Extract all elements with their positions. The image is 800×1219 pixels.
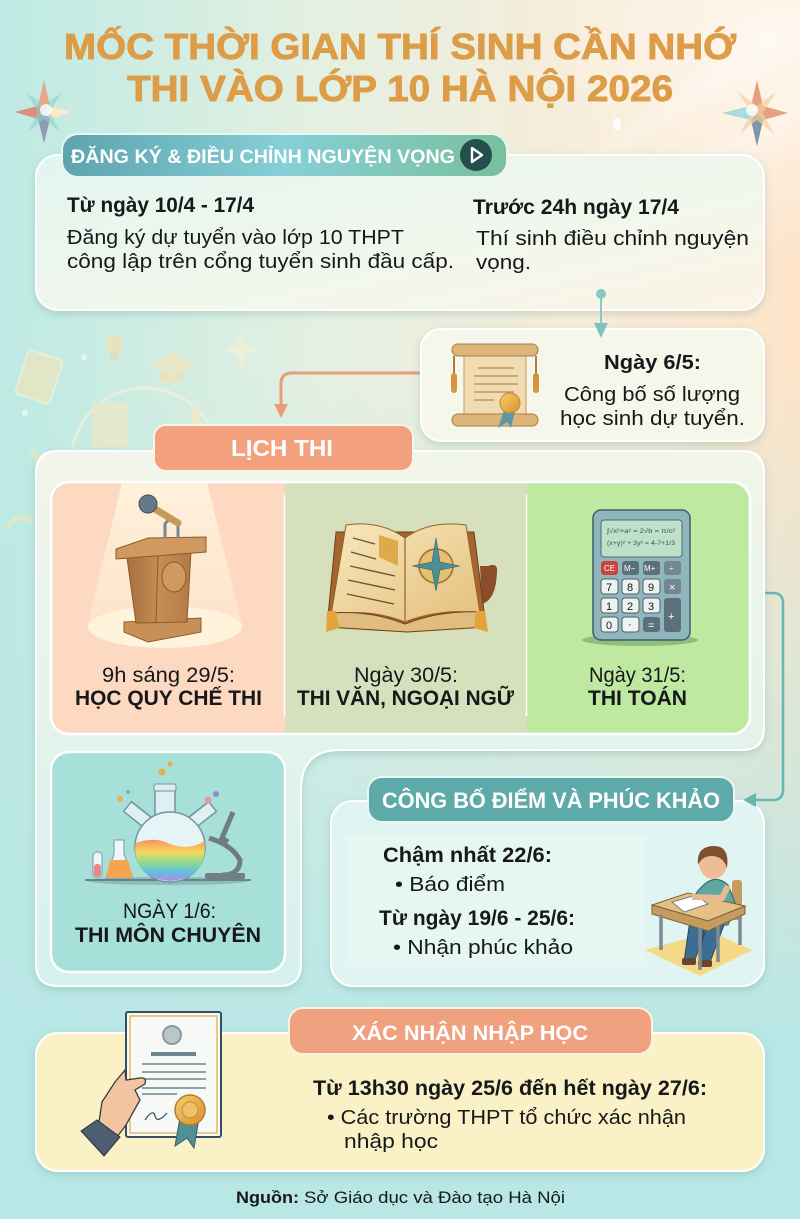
- text: registration period: công lập trên cổng tuyển sinh đầu cấp.: [67, 250, 454, 273]
- text: enrolment details: [313, 1077, 707, 1153]
- text: adjustment deadline: Trước 24h ngày 17/4: [473, 196, 679, 219]
- icon: calculator: =: [648, 620, 654, 632]
- text: 1/6: [75, 900, 261, 947]
- title: THI VÀO LỚP 10 HÀ NỘI 2026: [127, 67, 673, 109]
- icon: left compass star: [15, 80, 72, 143]
- title: [64, 25, 736, 109]
- icon: scroll: [451, 344, 539, 428]
- text: registration period: [67, 194, 454, 273]
- text: adjustment deadline: [473, 196, 749, 274]
- arrow: 6/5 to exam schedule: [274, 373, 421, 418]
- source: Nguồn:: [236, 1188, 299, 1207]
- icon: calculator: M−: [624, 564, 636, 573]
- icon: calculator: [582, 510, 698, 646]
- panel: enrolment confirmation: [36, 1008, 764, 1171]
- icon: calculator: CE: [604, 564, 615, 573]
- panel: specialised subject card: [51, 752, 285, 972]
- text: 31/5: THI TOÁN: [588, 687, 687, 710]
- text: 29/5: 9h sáng 29/5:: [102, 664, 235, 687]
- icon: open book with compass: [326, 524, 497, 632]
- panel: results and review: [331, 777, 764, 986]
- heading: results and review: CÔNG BỐ ĐIỂM VÀ PHÚC KHẢO: [382, 787, 720, 813]
- text: 31/5: Ngày 31/5:: [589, 664, 686, 687]
- text: 1/6: NGÀY 1/6:: [123, 900, 216, 923]
- arrow: math exam to results: [743, 593, 783, 807]
- heading: enrolment confirmation: XÁC NHẬN NHẬP HỌC: [352, 1020, 588, 1045]
- text: announcement 6/5: Ngày 6/5:: [604, 351, 701, 374]
- text: adjustment deadline: vọng.: [476, 251, 531, 274]
- icon: chemistry flasks and microscope: [85, 762, 251, 885]
- icon: calculator: ×: [669, 582, 675, 594]
- title: MỐC THỜI GIAN THÍ SINH CẦN NHỚ: [64, 25, 736, 67]
- arrow: registration to 6/5: [594, 289, 608, 338]
- icon: calculator: 1: [606, 601, 612, 613]
- heading: enrolment confirmation: [289, 1008, 652, 1054]
- icon: calculator: 3: [648, 601, 654, 613]
- heading: registration: ĐĂNG KÝ & ĐIỀU CHỈNH NGUYỆN VỌNG: [71, 144, 455, 168]
- text: registration period: Từ ngày 10/4 - 17/4: [67, 194, 254, 217]
- icon: calculator: (x+y)² + 3y² = 4-7+1/3: [607, 540, 675, 547]
- heading: results and review: [368, 777, 734, 822]
- icon: student at desk: [645, 846, 752, 976]
- panel: registration: [36, 134, 764, 310]
- text: results dates: [379, 844, 575, 959]
- text: registration period: Đăng ký dự tuyển vào lớp 10 THPT: [67, 226, 404, 249]
- text: announcement 6/5: [560, 351, 745, 430]
- text: announcement 6/5: học sinh dự tuyển.: [560, 407, 745, 430]
- text: results dates: Chậm nhất 22/6:: [383, 844, 552, 867]
- text: 30/5: [297, 664, 515, 710]
- heading: exam schedule: LỊCH THI: [231, 435, 333, 461]
- icon: calculator: 8: [627, 582, 633, 594]
- text: adjustment deadline: Thí sinh điều chỉnh nguyện: [476, 227, 749, 250]
- icon: hand holding certificate: [81, 1012, 221, 1156]
- icon: calculator: 0: [606, 620, 612, 632]
- text: enrolment details: nhập học: [344, 1130, 438, 1153]
- icon: calculator: 2: [627, 601, 633, 613]
- text: 1/6: THI MÔN CHUYÊN: [75, 923, 261, 947]
- icon: calculator: ∫√x²+a² = 2√b = π/c²: [606, 527, 676, 535]
- text: results dates: Từ ngày 19/6 - 25/6:: [379, 907, 575, 930]
- text: 31/5: [588, 664, 687, 710]
- icon: calculator: M+: [644, 564, 656, 573]
- panel: three-day exam card: [51, 482, 750, 734]
- icon: calculator: ·: [628, 619, 632, 631]
- heading: registration: [62, 134, 507, 177]
- text: 30/5: Ngày 30/5:: [354, 664, 458, 687]
- icon: calculator: 9: [648, 582, 654, 594]
- heading: exam schedule: [154, 425, 413, 471]
- source: Sở Giáo dục và Đào tạo Hà Nội: [304, 1188, 565, 1207]
- text: announcement 6/5: Công bố số lượng: [564, 383, 740, 406]
- icon: calculator: ÷: [669, 564, 674, 573]
- decorative faded education icons: [8, 332, 258, 536]
- text: 29/5: HỌC QUY CHẾ THI: [75, 687, 262, 710]
- icon: calculator: +: [668, 611, 674, 623]
- panel: large exam schedule: [36, 451, 764, 986]
- text: 30/5: THI VĂN, NGOẠI NGỮ: [297, 686, 515, 710]
- text: enrolment details: Từ 13h30 ngày 25/6 đến hết ngày 27/6:: [313, 1077, 707, 1100]
- panel: number of candidates announcement: [421, 329, 764, 441]
- icon: calculator: 7: [606, 582, 612, 594]
- text: enrolment details: • Các trường THPT tổ chức xác nhận: [327, 1106, 686, 1129]
- text: results dates: • Nhận phúc khảo: [393, 936, 573, 959]
- icon: right compass star: [722, 80, 788, 146]
- text: results dates: • Báo điểm: [395, 873, 505, 896]
- text: 29/5: [75, 664, 262, 710]
- icon: podium with microphone: [87, 483, 243, 648]
